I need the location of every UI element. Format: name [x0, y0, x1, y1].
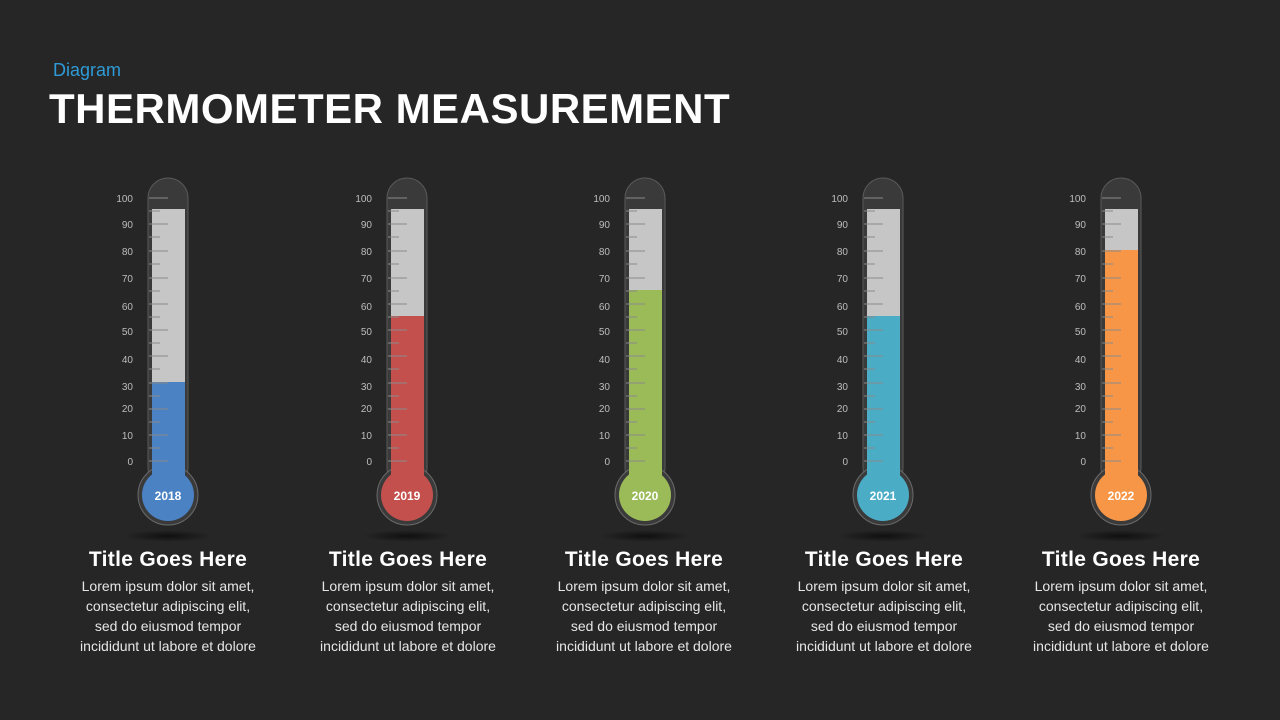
caption 2022: incididunt ut labore et dolore [1033, 638, 1209, 654]
caption 2019: incididunt ut labore et dolore [320, 638, 496, 654]
caption 2018 [80, 548, 256, 654]
caption 2018: sed do eiusmod tempor [95, 618, 241, 634]
thermometer 2022 [1069, 178, 1166, 542]
caption 2022: Lorem ipsum dolor sit amet, [1035, 578, 1207, 594]
title: THERMOMETER MEASUREMENT [49, 85, 730, 132]
caption 2020: Title Goes Here [565, 548, 723, 571]
caption 2019: Title Goes Here [329, 548, 487, 571]
thermometer 2021: 2021 [870, 489, 897, 503]
caption 2021: sed do eiusmod tempor [811, 618, 957, 634]
caption 2018: consectetur adipiscing elit, [86, 598, 250, 614]
caption 2019: consectetur adipiscing elit, [326, 598, 490, 614]
thermometer 2020: 2020 [632, 489, 659, 503]
caption 2020 [556, 548, 732, 654]
caption 2018: incididunt ut labore et dolore [80, 638, 256, 654]
thermometer 2021 [831, 178, 928, 542]
caption 2020: incididunt ut labore et dolore [556, 638, 732, 654]
caption 2019: Lorem ipsum dolor sit amet, [322, 578, 494, 594]
caption 2020: Lorem ipsum dolor sit amet, [558, 578, 730, 594]
thermometer 2020 [593, 178, 690, 542]
caption 2021: incididunt ut labore et dolore [796, 638, 972, 654]
caption 2021: Lorem ipsum dolor sit amet, [798, 578, 970, 594]
caption 2020: consectetur adipiscing elit, [562, 598, 726, 614]
caption 2021: consectetur adipiscing elit, [802, 598, 966, 614]
caption 2021: Title Goes Here [805, 548, 963, 571]
caption 2022: Title Goes Here [1042, 548, 1200, 571]
caption 2019: sed do eiusmod tempor [335, 618, 481, 634]
caption 2022: consectetur adipiscing elit, [1039, 598, 1203, 614]
thermometer 2018 [116, 178, 213, 542]
caption 2020: sed do eiusmod tempor [571, 618, 717, 634]
subtitle: Diagram [53, 60, 121, 80]
thermometer 2019 [355, 178, 452, 542]
caption 2022: sed do eiusmod tempor [1048, 618, 1194, 634]
thermometer 2018: 2018 [155, 489, 182, 503]
caption 2018: Lorem ipsum dolor sit amet, [82, 578, 254, 594]
thermometer 2022: 2022 [1108, 489, 1135, 503]
caption 2022 [1033, 548, 1209, 654]
caption 2019 [320, 548, 496, 654]
thermometer 2019: 2019 [394, 489, 421, 503]
caption 2018: Title Goes Here [89, 548, 247, 571]
caption 2021 [796, 548, 972, 654]
